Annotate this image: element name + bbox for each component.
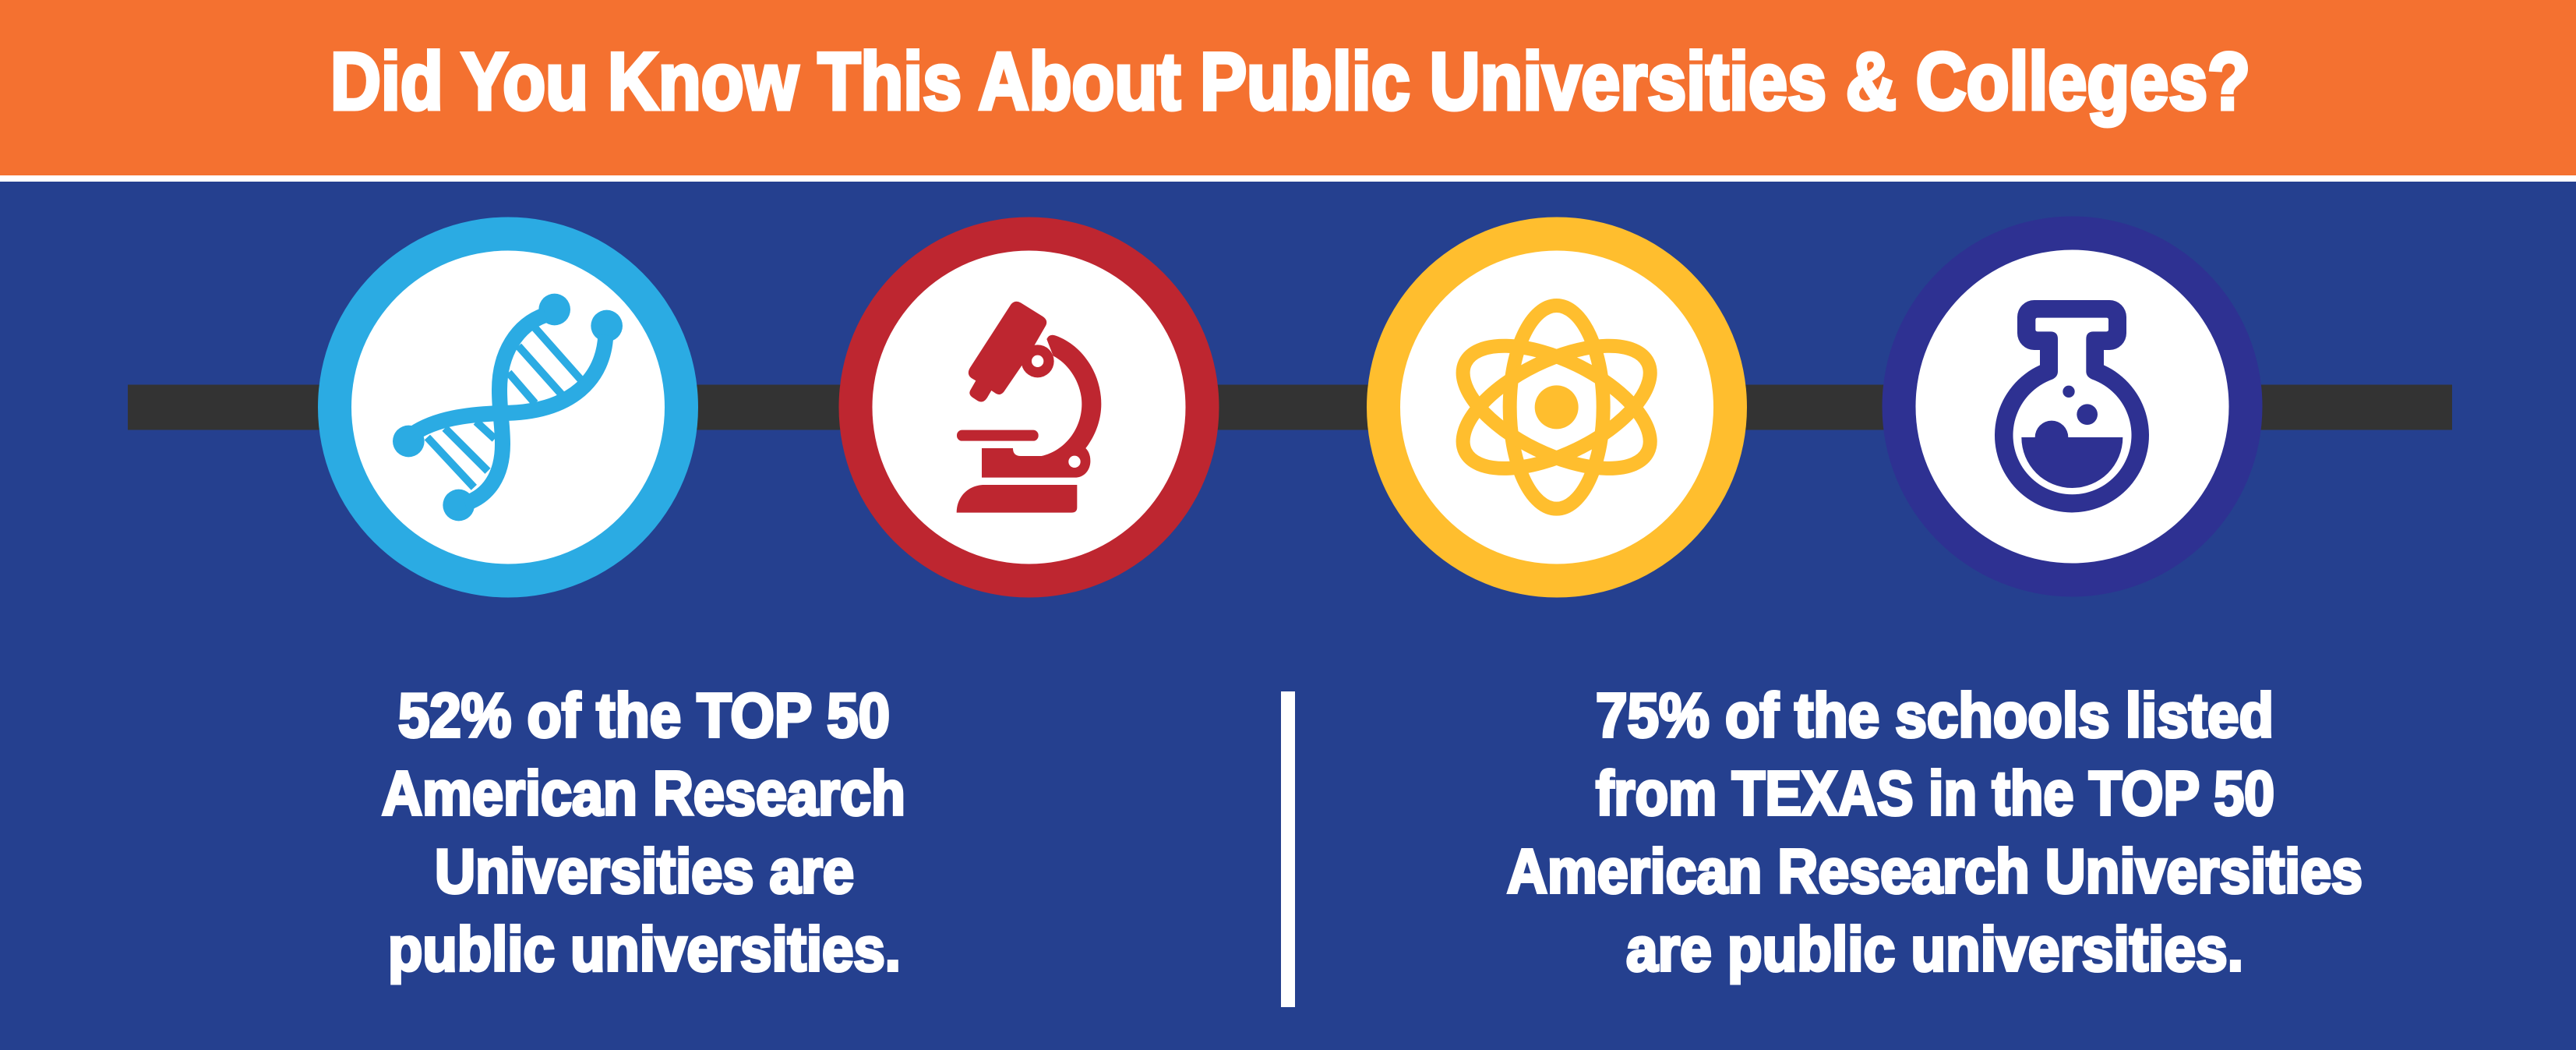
- badge: microscope: [838, 217, 1219, 597]
- connector bar: [128, 385, 2452, 430]
- vertical divider: [1281, 691, 1295, 1007]
- text block: 52% statistic: 52% of the TOP 50: [398, 681, 890, 750]
- title: Did You Know This About Public Universities & Colleges?: [330, 37, 2250, 127]
- icon: DNA helix: [393, 294, 623, 521]
- text block: 75% statistic: American Research Universities: [1507, 836, 2363, 906]
- badge: atom: [1367, 217, 1747, 597]
- badge: flask: [1883, 217, 2263, 597]
- text block: 52% statistic: American Research: [382, 758, 905, 828]
- text block: 75% statistic: 75% of the schools listed: [1596, 681, 2274, 750]
- text block: 75% statistic: are public universities.: [1626, 914, 2243, 984]
- text block: 52% statistic: public universities.: [388, 914, 901, 984]
- icon: microscope: [957, 302, 1101, 513]
- icon: atom: [1445, 306, 1668, 509]
- text block: 75% statistic: from TEXAS in the TOP 50: [1596, 758, 2274, 828]
- text block: 75% statistic: [1507, 681, 2363, 984]
- text block: 52% statistic: Universities are: [435, 836, 854, 906]
- badge: DNA: [318, 217, 698, 597]
- text block: 52% statistic: [382, 681, 905, 984]
- header banner: [0, 0, 2576, 182]
- icon: flask: [1995, 300, 2149, 512]
